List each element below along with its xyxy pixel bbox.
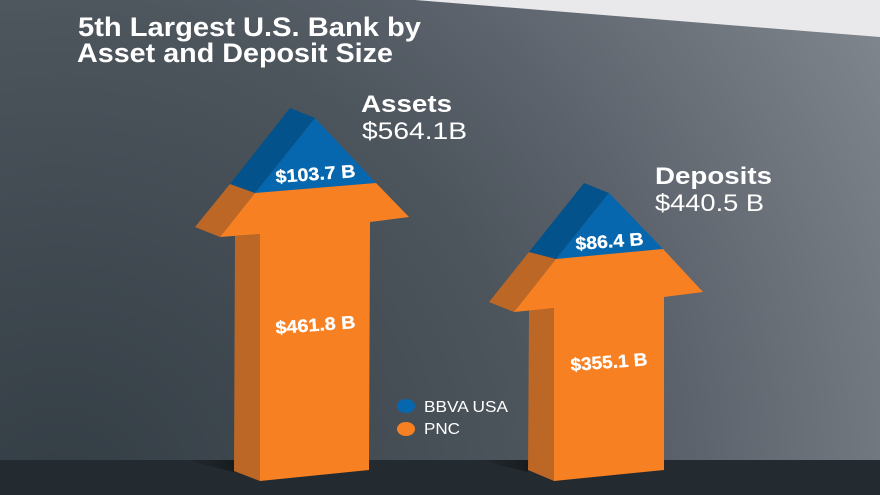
legend item: BBVA USA: BBVA USA bbox=[424, 399, 509, 416]
legend bbox=[397, 399, 509, 438]
arrow: assets bbox=[195, 108, 409, 481]
BBVA USA assets segment bbox=[230, 108, 376, 193]
title bbox=[77, 12, 421, 68]
assets heading: $564.1B bbox=[362, 118, 467, 145]
label: PNC assets value: $461.8 B bbox=[275, 312, 356, 338]
deposits heading: $440.5 B bbox=[655, 190, 764, 217]
assets heading: Assets bbox=[361, 91, 452, 118]
legend item: PNC: PNC bbox=[424, 421, 460, 438]
label: BBVA deposits value: $86.4 B bbox=[575, 229, 644, 254]
PNC deposits front face bbox=[514, 249, 703, 481]
title: 5th Largest U.S. Bank by bbox=[78, 12, 421, 42]
assets heading bbox=[361, 91, 467, 145]
title: Asset and Deposit Size bbox=[77, 38, 393, 68]
BBVA USA deposits segment bbox=[529, 183, 663, 259]
PNC assets side faces bbox=[195, 184, 260, 481]
PNC deposits side faces bbox=[489, 252, 556, 481]
label: PNC deposits value: $355.1 B bbox=[570, 349, 648, 375]
label: BBVA assets value: $103.7 B bbox=[275, 161, 356, 187]
deposits heading: Deposits bbox=[655, 163, 772, 190]
deposits heading bbox=[655, 163, 772, 217]
PNC assets front face bbox=[220, 183, 409, 481]
arrow: deposits bbox=[489, 183, 703, 481]
